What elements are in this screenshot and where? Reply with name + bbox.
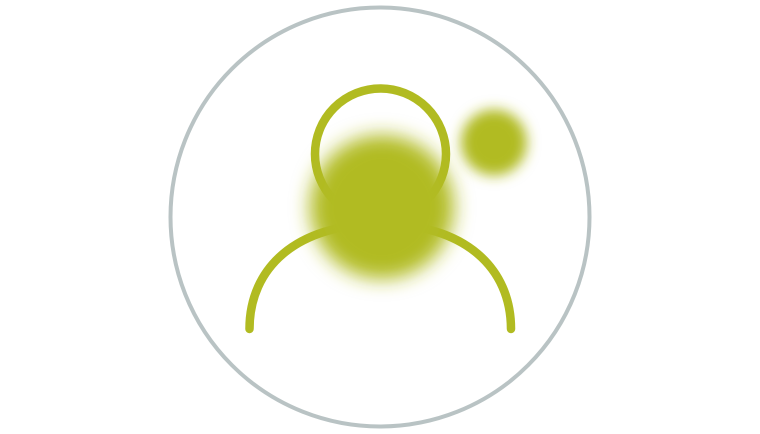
person shoulders outline (250, 224, 511, 329)
small blurred dot (461, 110, 527, 176)
person head outline (315, 88, 446, 220)
icon: person (250, 88, 527, 329)
outer ring (170, 8, 590, 426)
large blurred dot (310, 135, 454, 279)
